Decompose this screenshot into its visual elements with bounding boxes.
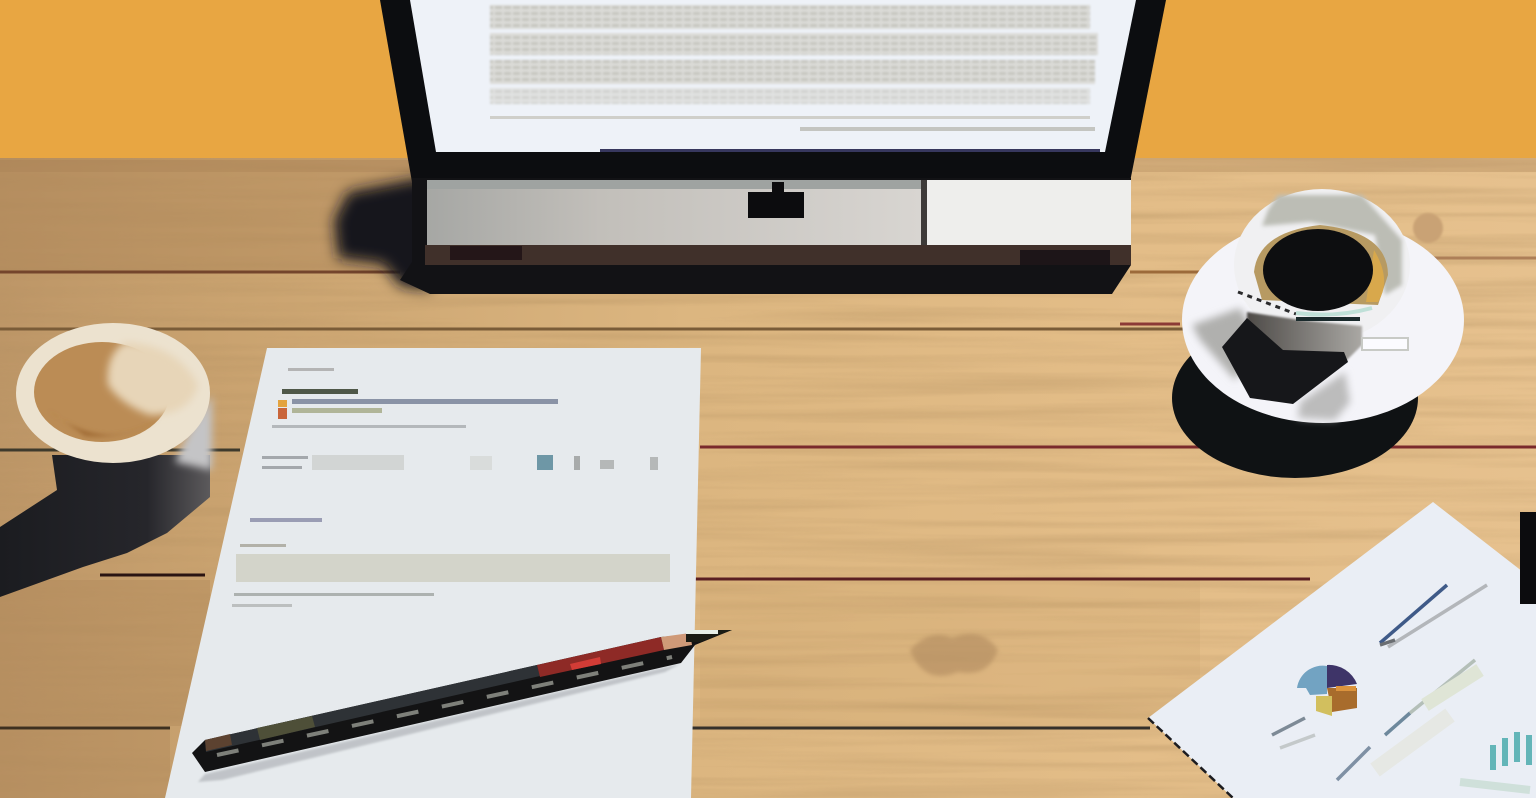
- chart light blocks: [1425, 670, 1480, 705]
- pen body: [192, 630, 732, 772]
- plank lines: [0, 258, 1536, 728]
- stand lower block: [400, 178, 1131, 294]
- cup grey band: [1247, 312, 1362, 362]
- cup handle: [1362, 338, 1408, 350]
- pie chart: [1297, 665, 1357, 716]
- latte: [34, 342, 170, 442]
- monitor shadow: [334, 176, 430, 290]
- pen collar: [661, 633, 692, 650]
- monitor: [380, 0, 1166, 294]
- stand logo: [748, 182, 804, 218]
- document form row: [262, 455, 658, 470]
- edge object: [1520, 512, 1536, 604]
- right coffee cup and saucer: [1172, 189, 1464, 478]
- golden rim: [1254, 225, 1388, 305]
- pen shadow: [198, 664, 680, 782]
- table shadow: [1172, 318, 1418, 478]
- wood knot: [910, 634, 998, 676]
- latte foam: [108, 342, 198, 415]
- screen text lines: [490, 5, 1100, 152]
- rim highlight: [1296, 308, 1372, 315]
- left saucer shade: [1192, 308, 1262, 380]
- cup shadow and body: [0, 455, 210, 597]
- saucer stain: [1413, 213, 1443, 243]
- monitor frame: [380, 0, 1166, 182]
- wall: [0, 0, 1536, 160]
- stand brown strip: [425, 245, 1131, 265]
- pen tip: [686, 630, 732, 642]
- document header lines: [272, 368, 558, 428]
- cup side highlight: [175, 395, 212, 470]
- pen dashes: [217, 657, 672, 755]
- lower saucer shade: [1298, 372, 1350, 420]
- checker edge: [1238, 292, 1296, 314]
- saucer: [1182, 217, 1464, 423]
- cup outer: [1234, 189, 1410, 341]
- cup rim: [16, 323, 210, 463]
- pen: [192, 630, 732, 782]
- document: [165, 348, 701, 798]
- chart paper: [1148, 502, 1536, 798]
- monitor screen: [410, 0, 1136, 152]
- left coffee cup: [0, 323, 212, 597]
- latte dark crema: [48, 410, 160, 437]
- paper lower-left edge: [1148, 718, 1233, 798]
- pen upper stripe: [205, 665, 540, 752]
- coffee: [1263, 229, 1373, 311]
- pen red section: [537, 637, 664, 677]
- chart heading marks: [1380, 585, 1487, 647]
- document body text: [232, 518, 670, 607]
- chart line marks: [1272, 660, 1475, 780]
- cup dark body: [1222, 318, 1348, 404]
- teal bar chart: [1490, 732, 1532, 770]
- rim grey shade: [1262, 195, 1402, 295]
- monitor stand base: [427, 188, 921, 245]
